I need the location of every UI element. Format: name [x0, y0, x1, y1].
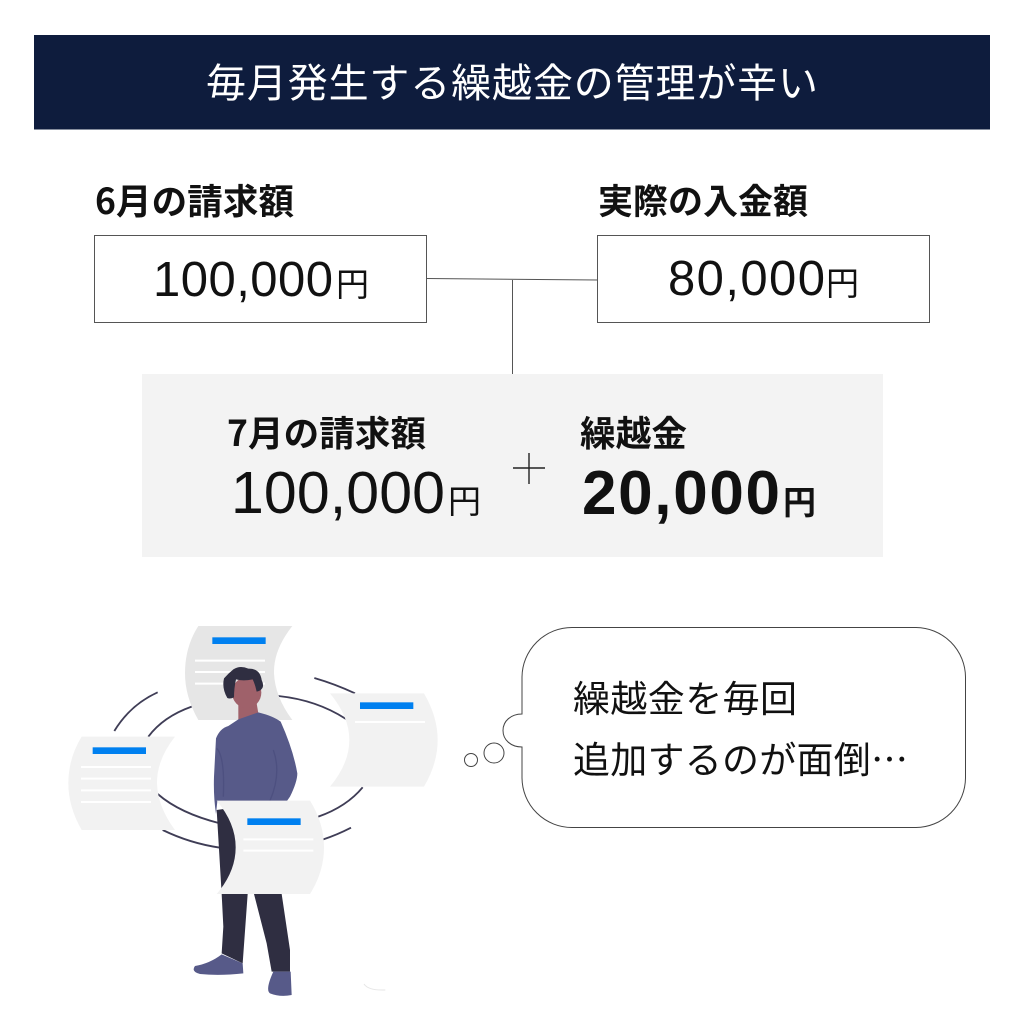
- panel: actual payment: 80,000: [668, 252, 825, 306]
- neck: [238, 703, 258, 721]
- carryover amount: 20,000: [582, 459, 780, 528]
- title banner: [34, 35, 990, 130]
- panel: June invoice: 6月の請求額: [95, 174, 294, 225]
- document: left: [68, 737, 175, 830]
- panel: June invoice: [94, 174, 426, 322]
- plus sign: [513, 453, 545, 484]
- panel: actual payment: 実際の入金額: [598, 174, 808, 225]
- thought bubble: [464, 627, 966, 828]
- panel: June invoice: 円: [336, 258, 369, 306]
- bubble text: 繰越金を毎回: [573, 669, 797, 723]
- July invoice amount: 円: [448, 475, 481, 523]
- July invoice label: 7月の請求額: [227, 406, 426, 457]
- document: right: [330, 693, 438, 787]
- connector lines: [427, 278, 598, 374]
- document: top: [185, 626, 292, 720]
- document: front: [217, 801, 324, 894]
- bubble text: [573, 669, 908, 784]
- illustration: person surrounded by documents: [68, 626, 438, 996]
- carryover label: 繰越金: [580, 406, 687, 457]
- sweater: [214, 712, 297, 814]
- shoes: [194, 954, 292, 996]
- bubble text: 追加するのが面倒…: [573, 730, 908, 784]
- panel: actual payment: 円: [826, 257, 859, 305]
- face: [232, 677, 261, 708]
- hair: [223, 667, 263, 699]
- sweater arm folds: [217, 748, 277, 801]
- title banner: 毎月発生する繰越金の管理が辛い: [206, 51, 818, 109]
- trousers: [217, 800, 290, 972]
- panel: July invoice total: [142, 374, 883, 557]
- panel: June invoice: 100,000: [153, 253, 333, 307]
- July invoice amount: 100,000: [231, 460, 445, 526]
- thought bubble small circles: [464, 743, 504, 766]
- small floor mark: [364, 984, 385, 990]
- person: [194, 667, 297, 996]
- panel: actual payment: [598, 174, 930, 322]
- carryover amount: 円: [783, 476, 816, 524]
- orbit arcs: [114, 678, 363, 848]
